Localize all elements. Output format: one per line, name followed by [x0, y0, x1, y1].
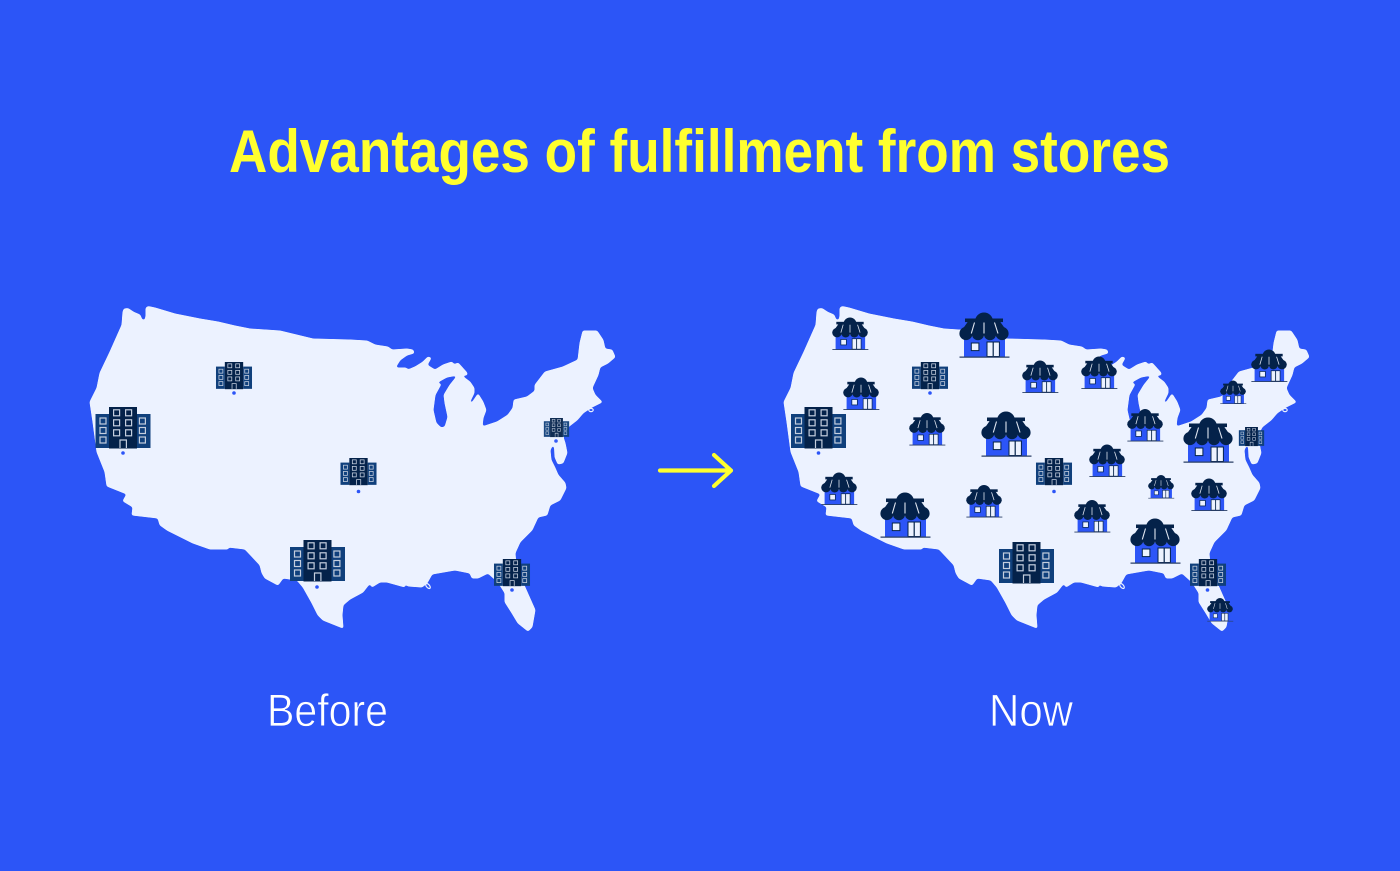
- icon: warehouse, central: [340, 458, 377, 493]
- title: Advantages of fulfillment from stores: [229, 118, 1170, 185]
- map: United States before: [90, 306, 615, 631]
- icon: small stores: [1148, 380, 1246, 621]
- icon: large warehouse, south: [290, 540, 345, 589]
- panel: before map: [90, 306, 615, 631]
- panel: now map: [784, 306, 1309, 631]
- icon: large warehouse, west: [96, 407, 150, 455]
- icon: large stores: [880, 312, 1234, 563]
- icon: small warehouse, northeast: [544, 418, 569, 443]
- icon: warehouse, Florida: [494, 559, 530, 592]
- label: before: Before: [267, 685, 388, 736]
- arrow: [660, 455, 731, 486]
- icon: medium stores: [821, 318, 1287, 532]
- map: United States now: [784, 306, 1309, 631]
- icon: warehouse, north: [216, 362, 252, 395]
- icon: warehouses: [791, 362, 1264, 592]
- label: now: Now: [989, 685, 1073, 736]
